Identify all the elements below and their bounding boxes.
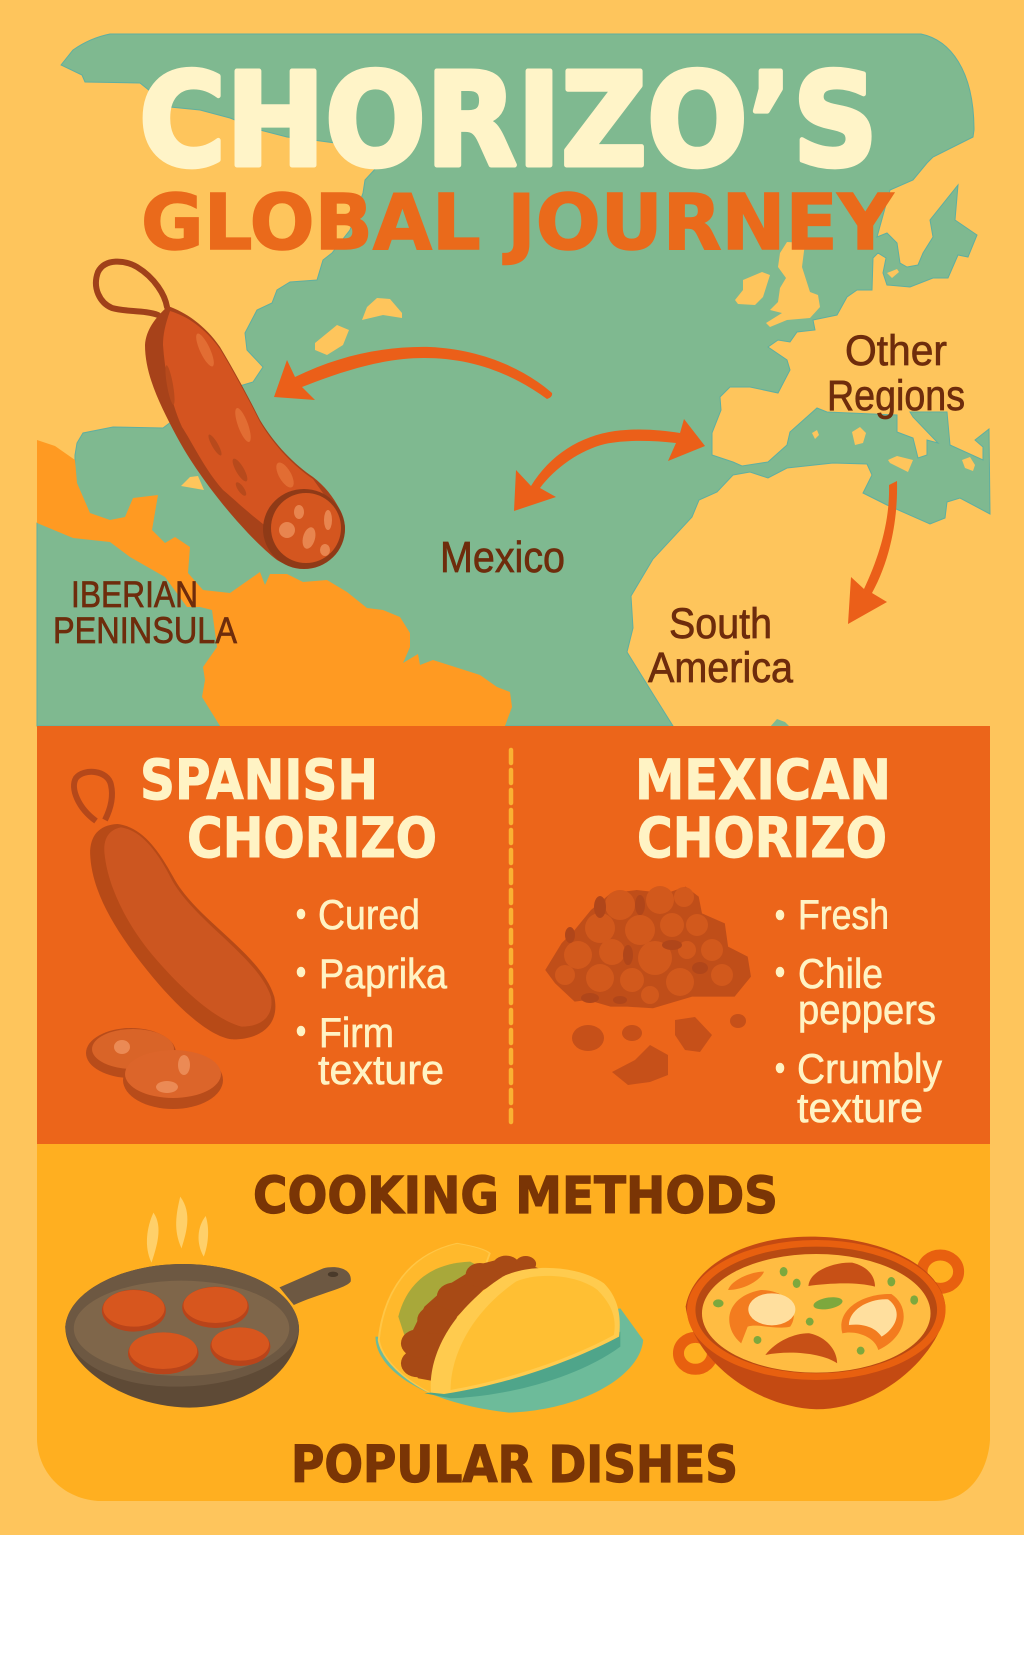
arrow: to South America <box>848 481 897 624</box>
list: Mexican traits: peppers <box>798 986 936 1033</box>
front tortilla <box>451 1276 615 1390</box>
sausage body <box>90 824 275 1039</box>
bottom sea inlet <box>770 719 790 727</box>
list: Mexican traits: Fresh <box>798 891 889 938</box>
icon: hanging chorizo sausage <box>96 262 345 569</box>
crumble pile highlights <box>555 886 733 1004</box>
icon: frying pan with chorizo <box>65 1197 351 1408</box>
icon: Spanish chorizo <box>74 772 275 1109</box>
steam <box>147 1197 208 1263</box>
list: Mexican traits: Chile <box>798 950 883 997</box>
pan handle <box>279 1267 351 1305</box>
crumble pile shadows <box>565 895 708 1004</box>
sausage string loop <box>96 262 167 315</box>
bowl inner shadow <box>695 1247 937 1373</box>
sausage slices <box>86 1028 223 1109</box>
sausage texture marks <box>164 365 250 497</box>
Atlantic islands <box>315 242 975 472</box>
sausage fat highlights <box>193 332 297 490</box>
heading: Mexican Chorizo: MEXICAN <box>635 748 891 812</box>
sausage body <box>145 306 345 568</box>
bowl rim <box>687 1240 946 1380</box>
heading: Spanish Chorizo: CHORIZO <box>187 806 437 870</box>
panel: world map <box>37 34 990 727</box>
map label: Iberian Peninsula <box>53 574 237 651</box>
taco meat <box>401 1256 539 1382</box>
map label: Mexico: Mexico <box>440 533 565 582</box>
map label: Iberian Peninsula: IBERIAN <box>71 574 198 615</box>
sausage highlight side <box>163 311 335 545</box>
sausage cut end <box>263 489 345 569</box>
list: Spanish traits: Firm <box>319 1009 394 1056</box>
icon: taco on plate <box>375 1243 643 1413</box>
map label: South America <box>648 600 793 692</box>
subtitle: GLOBAL JOURNEY: GLOBAL JOURNEY <box>141 179 894 268</box>
map label: Iberian Peninsula: PENINSULA <box>53 610 237 651</box>
map label: Other Regions: Other <box>845 327 947 375</box>
map label: Other Regions: Regions <box>827 372 965 420</box>
lettuce <box>398 1262 486 1337</box>
heading: Mexican Chorizo <box>635 748 891 870</box>
list: Spanish traits <box>297 891 448 1093</box>
front tortilla rim <box>431 1268 620 1394</box>
bowl body <box>686 1237 946 1409</box>
pan rim <box>65 1264 299 1387</box>
map label: South America: America <box>648 644 793 692</box>
sausage highlight <box>104 827 271 1027</box>
crumble pile base <box>545 887 751 1008</box>
panel background <box>37 1144 990 1501</box>
panel: chorizo comparison <box>37 726 990 1144</box>
heading: Spanish Chorizo <box>140 748 437 870</box>
string loop <box>74 772 112 821</box>
bowl handles <box>922 1255 959 1288</box>
peas <box>713 1267 918 1355</box>
arrow: to Americas <box>274 347 552 400</box>
panel: cooking and dishes <box>37 1144 990 1501</box>
plate shadow <box>424 1332 620 1398</box>
map label: Other Regions <box>827 327 965 420</box>
icon: crumbled Mexican chorizo <box>545 886 751 1085</box>
stew surface <box>702 1254 931 1373</box>
chorizo slices in pan <box>102 1287 270 1374</box>
map ocean <box>37 34 990 726</box>
list: Spanish traits: Cured <box>318 891 420 938</box>
list: Mexican traits: texture <box>797 1084 923 1131</box>
plate <box>375 1308 643 1413</box>
Florida land sliver <box>181 476 204 490</box>
heading: Mexican Chorizo: CHORIZO <box>637 806 887 870</box>
loose crumbs <box>572 1014 746 1085</box>
pan cooking surface <box>74 1281 289 1376</box>
icon: bowl of paella <box>678 1237 959 1409</box>
arrow: two-way Atlantic <box>514 419 705 511</box>
list: Mexican traits <box>776 891 942 1131</box>
title: CHORIZO'S: CHORIZO’S <box>139 46 878 196</box>
Latin America land <box>37 440 512 726</box>
shrimp and seafood <box>728 1263 904 1363</box>
map label: South America: South <box>669 600 772 648</box>
list: Spanish traits: Paprika <box>319 950 448 997</box>
dashed divider <box>509 750 513 1122</box>
comparison background <box>37 726 990 1144</box>
list: Mexican traits: Crumbly <box>797 1045 942 1092</box>
back tortilla <box>379 1243 490 1393</box>
list: Spanish traits: texture <box>318 1046 444 1093</box>
heading: Spanish Chorizo: SPANISH <box>140 748 378 812</box>
pan body <box>65 1264 299 1408</box>
heading: Popular Dishes: POPULAR DISHES <box>291 1436 738 1495</box>
heading: Cooking Methods: COOKING METHODS <box>253 1167 778 1226</box>
